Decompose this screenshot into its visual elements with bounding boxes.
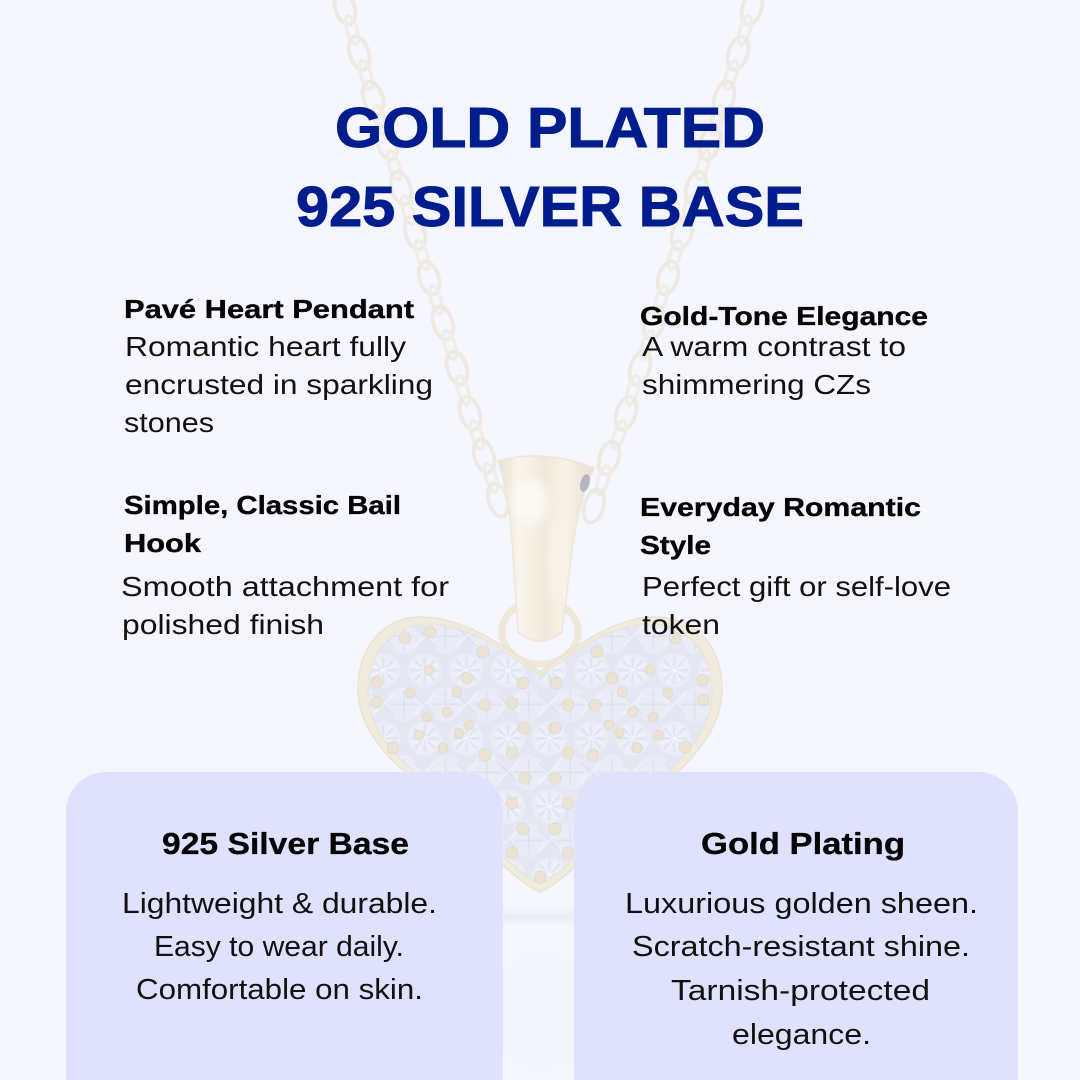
panel text: gold benefits: Tarnish-protected	[671, 975, 930, 1007]
feature: Everyday Romantic Style: Everyday Romantic	[640, 492, 921, 522]
panel text: gold benefits: Luxurious golden sheen.	[625, 888, 978, 920]
feature: Gold-Tone Elegance: shimmering CZs	[642, 369, 871, 400]
panel: Gold Plating	[574, 772, 1018, 1080]
feature: Simple, Classic Bail Hook	[121, 490, 449, 640]
necklace pendant illustration	[331, 0, 766, 1072]
feature: Gold-Tone Elegance: Gold-Tone Elegance	[640, 301, 928, 331]
panel text: silver benefits: Easy to wear daily.	[154, 931, 404, 963]
feature: Pavé Heart Pendant: encrusted in sparkling	[125, 369, 433, 400]
feature: Everyday Romantic Style	[640, 492, 951, 640]
heart pendant	[358, 617, 722, 892]
pendant ring	[502, 600, 578, 664]
pendant reflection	[490, 907, 590, 1072]
feature: Simple, Classic Bail Hook: Smooth attachment for	[121, 571, 449, 602]
feature: Pavé Heart Pendant: Pavé Heart Pendant	[124, 294, 414, 324]
feature: Pavé Heart Pendant: stones	[124, 407, 214, 438]
panel text: gold benefits: Scratch-resistant shine.	[632, 931, 970, 963]
feature: Everyday Romantic Style: Perfect gift or self-love	[642, 571, 951, 602]
feature: Simple, Classic Bail Hook: polished finish	[122, 609, 324, 640]
panel text: silver benefits	[122, 888, 437, 1006]
feature: Everyday Romantic Style: token	[642, 609, 720, 640]
right chain	[580, 0, 766, 525]
feature: Everyday Romantic Style: Style	[640, 530, 711, 560]
panel heading: Gold Plating: Gold Plating	[701, 826, 905, 861]
panel text: silver benefits: Comfortable on skin.	[136, 974, 423, 1006]
feature: Simple, Classic Bail Hook: Hook	[124, 528, 202, 558]
title: 925 SILVER BASE	[296, 175, 804, 239]
bail hook	[498, 456, 594, 641]
title: GOLD PLATED	[335, 96, 765, 160]
panel text: gold benefits	[625, 888, 978, 1051]
panel text: gold benefits: elegance.	[732, 1019, 871, 1051]
feature: Simple, Classic Bail Hook: Simple, Classic Bail	[124, 490, 401, 520]
feature: Gold-Tone Elegance: A warm contrast to	[642, 331, 906, 362]
panel heading: 925 Silver Base: 925 Silver Base	[162, 826, 409, 861]
feature: Gold-Tone Elegance	[640, 301, 928, 400]
panel text: silver benefits: Lightweight & durable.	[122, 888, 437, 920]
heart bead settings	[371, 626, 709, 883]
panel: 925 Silver Base	[66, 772, 503, 1080]
feature: Pavé Heart Pendant: Romantic heart fully	[125, 331, 406, 362]
feature: Pavé Heart Pendant	[124, 294, 433, 438]
title	[296, 96, 804, 239]
left chain	[331, 0, 512, 519]
